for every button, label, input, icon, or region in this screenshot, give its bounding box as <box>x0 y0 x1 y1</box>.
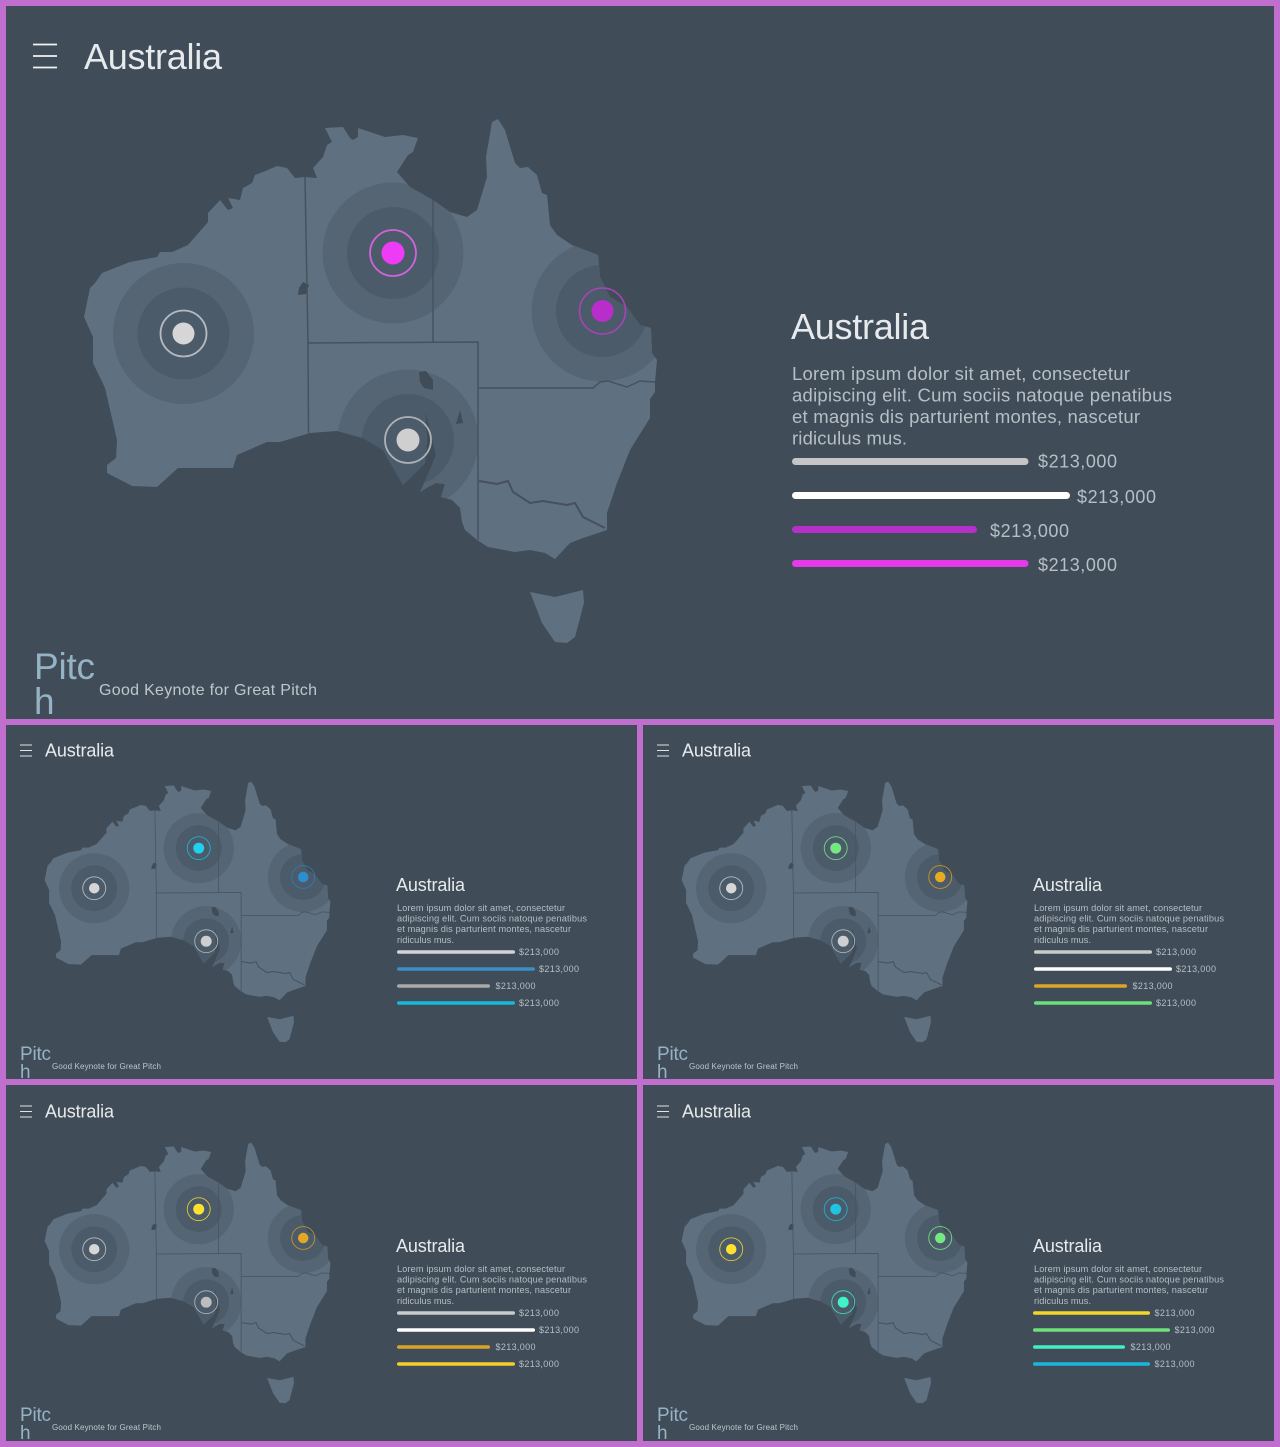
logo: h <box>20 1062 31 1083</box>
marker: Queensland <box>580 288 626 334</box>
text block: ridiculus mus. <box>792 428 907 448</box>
logo <box>657 1044 688 1083</box>
marker: South Australia <box>195 930 218 953</box>
text block: adipiscing elit. Cum sociis natoque penatibus <box>1034 1274 1224 1284</box>
marker: Western Australia <box>160 310 206 356</box>
bar chart: $213,000 <box>1176 964 1216 974</box>
text block: ridiculus mus. <box>1034 935 1091 945</box>
marker: Queensland <box>292 1227 315 1249</box>
icon: menu <box>20 745 32 756</box>
map: Australia with markers <box>682 782 975 1042</box>
bar chart: $213,000 <box>519 947 559 957</box>
title: Australia <box>682 1102 752 1122</box>
bar chart <box>792 452 1156 575</box>
bar chart: $213,000 <box>496 1342 536 1352</box>
bar chart: $213,000 <box>1156 947 1196 957</box>
text block <box>1034 903 1224 945</box>
logo: Pitc <box>657 1405 688 1426</box>
icon: menu <box>657 745 669 756</box>
bar chart: $213,000 <box>1132 981 1172 991</box>
tagline: Good Keynote for Great Pitch <box>689 1423 798 1432</box>
marker: South Australia <box>832 1291 855 1314</box>
bar chart: $213,000 <box>1174 1325 1214 1335</box>
text block: adipiscing elit. Cum sociis natoque penatibus <box>792 384 1172 406</box>
title: Australia <box>45 1102 115 1122</box>
text block: et magnis dis parturient montes, nascetur <box>792 406 1140 427</box>
bar chart: $213,000 <box>539 1325 579 1335</box>
heading: Australia <box>1033 875 1103 895</box>
map: Australia with markers <box>45 1143 338 1403</box>
text block <box>397 1264 587 1306</box>
text block <box>792 363 1172 448</box>
bar chart <box>1034 947 1216 1008</box>
title: Australia <box>84 36 223 77</box>
text block: Lorem ipsum dolor sit amet, consectetur <box>1034 903 1202 913</box>
panel: bottom left variant <box>6 1085 637 1444</box>
logo: h <box>20 1423 31 1444</box>
heading: Australia <box>396 1236 466 1256</box>
text block: et magnis dis parturient montes, nascetur <box>1034 924 1208 934</box>
icon: menu <box>20 1106 32 1117</box>
marker: South Australia <box>385 417 431 463</box>
text block: Lorem ipsum dolor sit amet, consectetur <box>1034 1264 1202 1274</box>
marker: South Australia <box>832 930 855 953</box>
heading: Australia <box>396 875 466 895</box>
text block: ridiculus mus. <box>397 935 454 945</box>
tagline: Good Keynote for Great Pitch <box>99 682 317 699</box>
map: Australia with markers <box>682 1143 975 1403</box>
text block: et magnis dis parturient montes, nascetur <box>1034 1285 1208 1295</box>
icon: menu <box>657 1106 669 1117</box>
marker: Northern Territory <box>370 230 416 276</box>
map: Australia with markers <box>84 119 672 643</box>
bar chart: $213,000 <box>519 1359 559 1369</box>
bar chart: $213,000 <box>519 998 559 1008</box>
heading: Australia <box>1033 1236 1103 1256</box>
map: Australia with markers <box>45 782 338 1042</box>
text block: ridiculus mus. <box>1034 1296 1091 1306</box>
logo <box>20 1405 51 1444</box>
logo: Pitc <box>20 1405 51 1426</box>
logo: Pitc <box>657 1044 688 1065</box>
logo: h <box>657 1062 668 1083</box>
bar chart: $213,000 <box>1038 555 1117 575</box>
marker: Western Australia <box>720 1238 743 1261</box>
title: Australia <box>682 740 752 760</box>
text block: adipiscing elit. Cum sociis natoque penatibus <box>397 914 587 924</box>
marker: Northern Territory <box>187 837 210 860</box>
logo: h <box>657 1423 668 1444</box>
marker: Queensland <box>292 866 315 888</box>
bar chart: $213,000 <box>1154 1359 1194 1369</box>
bar chart <box>397 947 579 1008</box>
tagline: Good Keynote for Great Pitch <box>52 1062 161 1071</box>
text block: Lorem ipsum dolor sit amet, consectetur <box>397 1264 565 1274</box>
text block: ridiculus mus. <box>397 1296 454 1306</box>
text block: et magnis dis parturient montes, nascetur <box>397 924 571 934</box>
text block: adipiscing elit. Cum sociis natoque penatibus <box>1034 914 1224 924</box>
heading: Australia <box>791 306 930 347</box>
bar chart: $213,000 <box>1038 452 1117 472</box>
marker: Western Australia <box>83 1238 106 1261</box>
marker: Western Australia <box>720 877 743 900</box>
bar chart: $213,000 <box>539 964 579 974</box>
bar chart: $213,000 <box>1156 998 1196 1008</box>
bar chart: $213,000 <box>1077 487 1156 507</box>
panel: top right variant <box>643 725 1274 1083</box>
marker: Northern Territory <box>187 1198 210 1221</box>
title: Australia <box>45 740 115 760</box>
bar chart <box>1033 1308 1214 1369</box>
marker: Northern Territory <box>824 1198 847 1221</box>
tagline: Good Keynote for Great Pitch <box>52 1423 161 1432</box>
logo <box>20 1044 51 1083</box>
icon: menu <box>33 44 57 68</box>
marker: Western Australia <box>83 877 106 900</box>
bar chart: $213,000 <box>519 1308 559 1318</box>
panel: main map slide <box>6 6 1274 722</box>
logo: h <box>34 681 55 722</box>
logo <box>34 646 95 722</box>
marker: Queensland <box>929 866 952 888</box>
marker: South Australia <box>195 1291 218 1314</box>
panel: top left variant <box>6 725 637 1083</box>
logo: Pitc <box>20 1044 51 1065</box>
marker: Queensland <box>929 1227 952 1249</box>
marker: Northern Territory <box>824 837 847 860</box>
text block <box>397 903 587 945</box>
text block: adipiscing elit. Cum sociis natoque penatibus <box>397 1274 587 1284</box>
bar chart: $213,000 <box>1130 1342 1170 1352</box>
text block: et magnis dis parturient montes, nascetur <box>397 1285 571 1295</box>
bar chart <box>397 1308 579 1369</box>
logo <box>657 1405 688 1444</box>
logo: Pitc <box>34 646 95 687</box>
text block <box>1034 1264 1224 1306</box>
panel: bottom right variant <box>643 1085 1274 1444</box>
bar chart: $213,000 <box>496 981 536 991</box>
text block: Lorem ipsum dolor sit amet, consectetur <box>792 363 1130 384</box>
text block: Lorem ipsum dolor sit amet, consectetur <box>397 903 565 913</box>
bar chart: $213,000 <box>990 521 1069 541</box>
bar chart: $213,000 <box>1154 1308 1194 1318</box>
tagline: Good Keynote for Great Pitch <box>689 1062 798 1071</box>
